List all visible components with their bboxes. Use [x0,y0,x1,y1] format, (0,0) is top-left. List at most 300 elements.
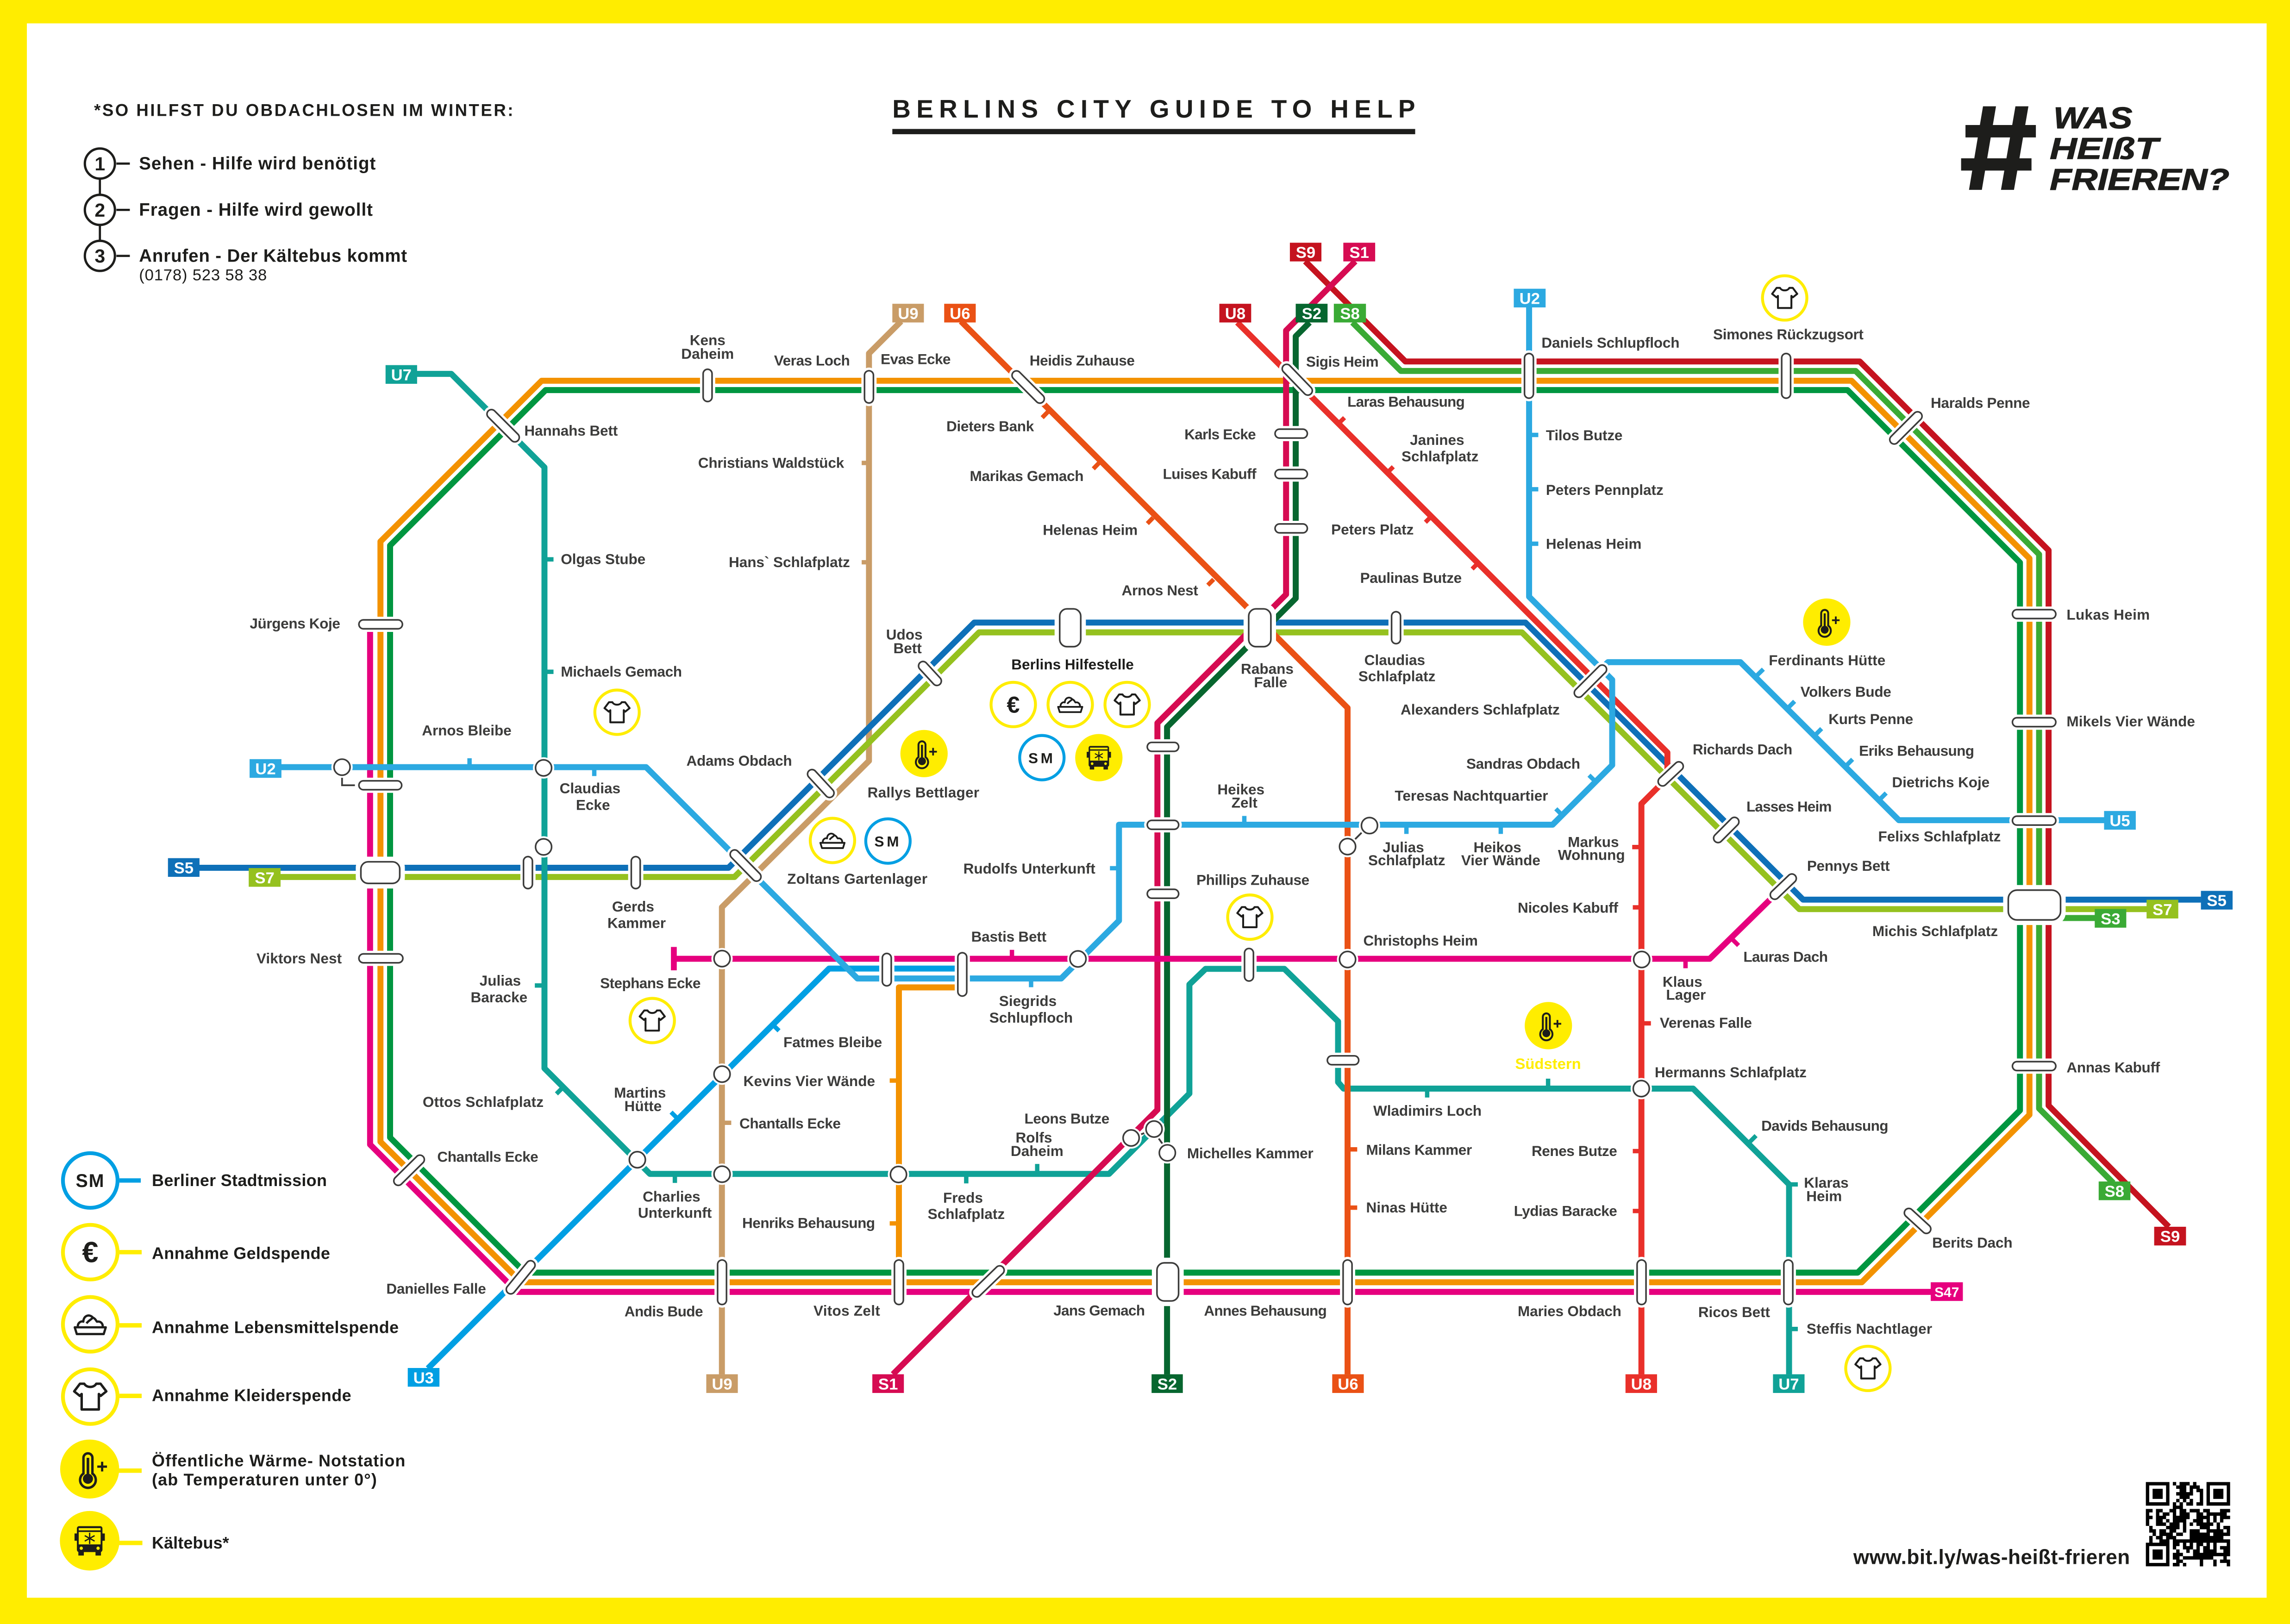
label: Sigis Heim: Sigis Heim [1306,353,1379,370]
label: Heikos Vier Wände: Vier Wände [1461,852,1540,868]
label: Vitos Zelt: Vitos Zelt [813,1302,880,1319]
label: Lukas Heim: Lukas Heim [2066,606,2150,623]
legend: Annahme Lebensmittelspende: Annahme Lebensmittelspende [152,1318,399,1337]
label: Luises Kabuff: Luises Kabuff [1163,466,1257,482]
label: Sandras Obdach: Sandras Obdach [1466,755,1580,772]
badge: S7 right: S7 [2152,901,2172,918]
station: Viktors Nest [363,956,399,961]
station: Adams Obdach [812,774,830,793]
label: Jürgens Koje: Jürgens Koje [250,615,340,631]
badge: S1 [1343,243,1375,262]
line end badges [168,243,2233,1393]
badge: U8: U8 [1225,305,1245,323]
label: Mikels Vier Wände: Mikels Vier Wände [2066,713,2195,730]
badge: S8 bottom [2099,1181,2130,1200]
station: Claudias Ecke [533,757,554,779]
legend: Berliner Stadtmission: Berliner Stadtmission [152,1171,327,1190]
label: Christians Waldstück: Christians Waldstück [698,454,845,471]
label: Klaus Lager: Lager [1666,986,1706,1003]
label: Rudolfs Unterkunft: Rudolfs Unterkunft [964,860,1095,877]
badge: S8: S8 [1340,305,1360,323]
station: Freds [888,1164,909,1185]
label: Ferdinants Hütte: Ferdinants Hütte [1769,652,1885,668]
label: Gerds Kammer: Kammer [607,914,666,931]
badge: U7 bottom [1773,1374,1804,1393]
line: U7 [416,374,1798,1374]
station: Mikels Vier Wände [2017,720,2052,725]
station: Lasses Heim [1718,822,1734,838]
label: Stephans Ecke: Stephans Ecke [600,974,701,991]
badge: S7 left: S7 [255,869,275,887]
icon: shirt at Michaels Gemach [595,690,639,734]
legend: Öffentliche Wärme-Notstation [60,1440,405,1499]
badge: S7 left [249,868,281,887]
label: Peters Pennplatz: Peters Pennplatz [1546,481,1664,498]
label: Julias Baracke: Baracke [470,989,527,1006]
label: Peters Platz: Peters Platz [1331,521,1414,537]
label: Heikes Zelt: Heikes [1217,781,1264,798]
label: Hans Schlafplatz: Hans` Schlafplatz [729,554,850,570]
station: Michis Schlafplatz [2005,887,2064,923]
step 2: 2 [94,200,105,221]
station: Udos Bett [923,666,937,681]
label: Leons Butze: Leons Butze [1024,1110,1109,1127]
icon: shirt at Stephans Ecke [630,999,675,1043]
line: U9: U9 [712,1375,732,1393]
label: Lauras Dach: Lauras Dach [1743,948,1828,965]
label: Berits Dach: Berits Dach [1932,1234,2013,1251]
badge: S8 bottom: S8 [2105,1183,2124,1200]
line: U9: U9 [898,305,919,323]
icon: food at Zoltans Gartenlager [810,818,855,862]
label: Dietrichs Koje: Dietrichs Koje [1892,774,1990,791]
panel: how to help steps [85,100,513,284]
label: Eriks Behausung: Eriks Behausung [1859,743,1974,759]
step 2 [85,195,373,225]
logo: was heißt frieren [1961,101,2229,196]
icon: food at Hilfestelle [1048,682,1092,727]
label: Kurts Penne: Kurts Penne [1828,711,1913,727]
badge: U7 [386,365,417,384]
label: Michelles Kammer: Michelles Kammer [1187,1145,1314,1162]
station: Jans Gemach [1154,1260,1182,1304]
label: Arnos Nest: Arnos Nest [1122,582,1198,599]
line: S9 [1305,261,2169,1227]
label: Arnos Bleibe: Arnos Bleibe [422,722,512,739]
label: Claudias Ecke: Claudias [560,780,620,797]
station: Pennys Bett [1775,879,1792,895]
badge: S9 [1290,243,1321,262]
label: Claudias Ecke: Ecke [576,796,610,813]
station: Lukas Heim [2017,612,2052,617]
label: Haralds Penne: Haralds Penne [1931,394,2030,411]
legend: Annahme Geldspende [63,1225,330,1280]
station: S1 S2 Heikes [1152,823,1174,827]
station: Richards Dach [1663,766,1679,781]
station: left S5 S7 interchange [358,859,403,887]
label: Helenas Heim west: Helenas Heim [1043,522,1138,538]
step connectors [100,163,130,256]
logo text: FRIEREN? [2050,162,2229,196]
legend: Berliner Stadtmission: SM [75,1171,105,1191]
station: S1 crossing [977,1270,1000,1293]
badge: U2 left [250,759,282,778]
label: Daniels Schlupfloch: Daniels Schlupfloch [1541,334,1679,351]
line: U8 [1237,323,1667,1374]
badge: S1: S1 [1350,244,1369,262]
icon: shirt at Simones Rückzugsort [1763,276,1807,320]
step 1: 1 [94,153,105,175]
station: U7 S5 [533,836,554,857]
label: Maries Obdach: Maries Obdach [1518,1303,1621,1319]
step 1: Sehen - Hilfe wird benötigt [139,154,375,174]
label: Rallys Bettlager: Rallys Bettlager [868,784,979,800]
label: Claudias Schlafplatz east: Claudias [1364,651,1425,668]
label: Verenas Falle: Verenas Falle [1660,1014,1752,1031]
station: Daniels Schlupfloch [1527,358,1531,394]
station: Hilfestelle interchange [1057,606,1084,650]
label: Pennys Bett: Pennys Bett [1807,857,1890,874]
label: Heikos Vier Wände: Heikos [1473,839,1521,856]
badge: U2 top [1514,289,1545,307]
label: Siegrids Schlupfloch: Schlupfloch [989,1009,1073,1026]
label: Adams Obdach: Adams Obdach [687,752,792,769]
icon: SM at Zoltans Gartenlager [866,819,910,863]
label: Olgas Stube: Olgas Stube [561,551,645,568]
label: Kevins Vier Wände: Kevins Vier Wände [744,1073,875,1089]
line: S2 [1167,323,1309,1374]
label: Claudias Schlafplatz east: Schlafplatz [1358,668,1435,685]
logo text: HEIßT [2050,131,2161,165]
badge: S5 left: S5 [174,859,194,877]
station: Leons Butze [1144,1118,1165,1140]
legend: Berliner Stadtmission [63,1153,327,1208]
legend: Annahme Geldspende: € [82,1237,98,1269]
badge: S47: S47 [1934,1285,1959,1300]
badge: S5 right [2201,891,2233,910]
station: Phillips Zuhause [1246,953,1251,977]
icon: shirt at Hilfestelle [1105,682,1149,727]
badge: S9 bottom [2154,1227,2186,1246]
legend: Annahme Lebensmittelspende [63,1297,399,1352]
label: Janines Schlafplatz: Schlafplatz [1402,448,1478,465]
badge: S9 bottom: S9 [2160,1228,2180,1246]
line: S7 [281,632,2147,909]
label: Danielles Falle: Danielles Falle [386,1280,486,1297]
badge: U2 top: U2 [1520,290,1540,307]
station: U2 ring transfer [363,783,397,787]
label: Heidis Zuhause: Heidis Zuhause [1030,352,1135,369]
station: Kens Daheim [705,374,710,397]
icon: bus at Hilfestelle [1075,734,1122,781]
station connector links [342,775,1363,1145]
label: Udos Bett: Udos [886,626,923,643]
line: U5 [1592,662,2135,820]
label: Tilos Butze: Tilos Butze [1546,427,1622,443]
label: Milans Kammer: Milans Kammer [1366,1141,1472,1158]
station: Alexanders Schlafplatz [1579,669,1602,693]
station: Andis Bude [720,1264,725,1300]
badge: S5 right: S5 [2207,892,2227,910]
label: Gerds Kammer: Gerds [612,898,654,915]
station: Sigis Heim [1287,369,1308,391]
logo text: WAS [2053,101,2132,135]
label: Jans Gemach: Jans Gemach [1053,1302,1145,1318]
icon: SM at Hilfestelle: SM [1028,750,1056,766]
label: Michis Schlafplatz: Michis Schlafplatz [1872,923,1998,939]
label: Kens Daheim: Daheim [681,345,734,362]
station: Zoltans Gartenlager [735,854,757,877]
station name labels [250,326,2195,1337]
line: S1 [893,261,1355,1374]
label: Alexanders Schlafplatz: Alexanders Schlafplatz [1401,701,1560,718]
line: ring orange [381,381,2029,1282]
label: Martins Hütte: Hütte [625,1098,662,1114]
step 3: 3 [94,245,105,267]
station: Klaus Lager [1631,949,1652,970]
station: Chantalls Ecke [398,1160,420,1181]
station: S1 S2 upper [1152,744,1174,750]
station: U6 U2 [1337,836,1358,857]
label: Udos Bett: Bett [893,640,922,656]
badge: S1 bottom [872,1374,904,1393]
label: Renes Butze: Renes Butze [1532,1143,1617,1159]
station: Heidis Zuhause [1016,375,1040,399]
label: Helenas Heim east: Helenas Heim [1546,536,1641,552]
badge: U3: U3 [413,1369,434,1387]
label: Karls Ecke: Karls Ecke [1184,426,1256,443]
badge: U7: U7 [391,366,412,384]
step 3: Anrufen - Der Kältebus kommt [139,246,407,266]
badge: S2 bottom [1151,1374,1183,1393]
legend: Kältebus [60,1511,229,1571]
station: Peters Platz [1280,526,1303,531]
label: Markus Wohnung: Markus [1568,833,1619,850]
label: Rabans Falle: Falle [1254,674,1287,690]
label: Nicoles Kabuff: Nicoles Kabuff [1518,899,1618,916]
step 1 [85,149,375,179]
icon: euro at Hilfestelle: € [1007,691,1020,718]
label: Henriks Behausung: Henriks Behausung [742,1214,875,1231]
label: Christophs Heim: Christophs Heim [1364,932,1478,949]
label: Veras Loch: Veras Loch [774,352,850,369]
label: Davids Behausung: Davids Behausung [1761,1118,1889,1134]
badge: U8 bottom [1626,1374,1657,1393]
label: Chantalls Ecke west: Chantalls Ecke [437,1149,538,1165]
label: Klaus Lager: Klaus [1663,973,1702,990]
legend: Öffentliche Wärme-Notstation: Öffentliche Wärme- Notstation [152,1451,405,1470]
station: Veras Loch [867,375,871,399]
icon: euro at Hilfestelle [991,682,1035,727]
label: Klaras Heim: Klaras [1804,1174,1849,1191]
station: Jürgens Koje [363,622,398,627]
label: Fatmes Bleibe: Fatmes Bleibe [783,1034,882,1050]
icon: shirt at Steffis Nachtlager [1846,1346,1890,1391]
label: Freds Schlafplatz: Freds [943,1189,983,1206]
station: U2 west [332,756,353,778]
step 2: Fragen - Hilfe wird gewollt [139,200,373,220]
badge: U8 bottom: U8 [1631,1375,1652,1393]
heading: so hilfst du: *SO HILFST DU OBDACHLOSEN IM WINTER: [94,100,513,119]
label: Rabans Falle: Rabans [1241,661,1294,677]
stations: transfer capsules [363,358,2052,1300]
label: Julias Schlafplatz: Julias [1383,839,1424,856]
footer url: www.bit.ly/was-heißt-frieren [1853,1546,2130,1569]
station: S1 S2 lower [1152,891,1174,896]
line: S3 [2056,917,2097,919]
badge: U2 left: U2 [255,761,276,778]
label: Annas Kabuff: Annas Kabuff [2066,1059,2160,1075]
label: Freds Schlafplatz: Schlafplatz [928,1206,1005,1222]
label: Berlins Hilfestelle: Berlins Hilfestelle [1011,656,1134,673]
label: Kens Daheim: Kens [690,331,726,348]
legend: Annahme Kleiderspende [63,1369,351,1424]
line: orange branch U1 [890,987,957,1259]
label: Simones Rückzugsort: Simones Rückzugsort [1713,326,1864,343]
station: Hannahs Bett [491,414,515,437]
line: U2 [281,306,1612,987]
line: S47 [370,625,1932,1292]
station: Felixs Schlafplatz [2017,818,2052,823]
legend: Annahme Geldspende: Annahme Geldspende [152,1243,330,1262]
badge: S8 [1334,304,1366,323]
badge: U5: U5 [2109,812,2130,830]
badge: S2 [1296,304,1327,323]
badge: U6 bottom: U6 [1338,1375,1358,1393]
label: Julias Schlafplatz: Schlafplatz [1368,852,1445,868]
line: S5 [199,623,2201,899]
station: Ricos Bett [1786,1264,1791,1300]
icon: shirt at Phillips Zuhause [1228,895,1272,939]
badge: U5 [2104,811,2136,830]
label: Hermanns Schlafplatz: Hermanns Schlafplatz [1655,1064,1807,1081]
label: Phillips Zuhause: Phillips Zuhause [1196,871,1309,888]
badge: U7 bottom: U7 [1778,1375,1799,1393]
station: U9 U7 [711,1163,733,1185]
station: U7 U6 [1332,1058,1354,1062]
badge: U6 [944,304,976,323]
badge: S2 bottom: S2 [1158,1375,1177,1393]
label: Julias Baracke: Julias [480,972,521,989]
badge: U3 [408,1368,439,1387]
label: Heikes Zelt: Zelt [1232,794,1258,811]
label: Klaras Heim: Heim [1806,1188,1842,1205]
label: Volkers Bude: Volkers Bude [1801,683,1891,700]
station: Rabans Falle [1246,606,1274,650]
line: ring green [390,390,2020,1273]
line: S8 [1352,323,2113,1183]
label: Südstern: Südstern [1515,1055,1581,1072]
station: Martins Hütte [627,1149,648,1170]
badge: S1 bottom: S1 [878,1375,898,1393]
label: Chantalls Ecke center: Chantalls Ecke [739,1115,841,1131]
line: U6 [961,321,1357,1374]
label: Felixs Schlafplatz: Felixs Schlafplatz [1878,828,2001,844]
label: Siegrids Schlupfloch: Siegrids [999,993,1057,1009]
station: magenta capsule 2 [960,957,965,992]
label: Rolfs Daheim: Rolfs [1016,1129,1052,1146]
station: Danielles Falle [511,1265,531,1289]
label: Lasses Heim: Lasses Heim [1746,798,1832,815]
label: Hannahs Bett: Hannahs Bett [524,422,618,439]
label: Markus Wohnung: Wohnung [1558,846,1625,863]
QR code [2146,1482,2230,1566]
station: magenta capsule 1 [884,958,889,981]
line: magenta M [674,898,1771,970]
station: Maries Obdach [1639,1264,1644,1300]
badge: U6: U6 [950,305,970,323]
label: Charlies Unterkunft: Unterkunft [638,1204,712,1221]
station: Claudias Schlafplatz [1394,616,1398,639]
label: Janines Schlafplatz: Janines [1410,431,1464,448]
station: Rolfs Daheim [1120,1127,1142,1149]
icon: SM at Zoltans Gartenlager: SM [875,833,901,849]
station: Berits Dach [1909,1213,1927,1229]
legend: Kältebus: Kältebus* [152,1533,229,1552]
icon: hash sign [1961,106,2036,190]
panel: legend [60,1153,405,1571]
station: Hermanns Schlafplatz [1631,1078,1652,1099]
badge: S3: S3 [2101,910,2121,928]
step 3 [85,241,407,284]
label: Steffis Nachtlager: Steffis Nachtlager [1807,1320,1932,1337]
label: Teresas Nachtquartier: Teresas Nachtquartier [1395,787,1548,804]
station: Annes Behausung [1345,1264,1350,1300]
label: Charlies Unterkunft: Charlies [643,1188,701,1205]
label: Bastis Bett: Bastis Bett [971,928,1047,945]
label: Viktors Nest: Viktors Nest [257,950,342,967]
panel: network map lines [199,261,2201,1393]
label: Ninas Hütte: Ninas Hütte [1366,1199,1447,1216]
icon: warmth at Rallys Bettlager [901,730,948,777]
label: Ricos Bett: Ricos Bett [1698,1304,1771,1320]
badge: S2: S2 [1302,305,1321,323]
badge: S9: S9 [1296,244,1315,262]
label: Andis Bude: Andis Bude [625,1303,703,1319]
label: Rolfs Daheim: Daheim [1011,1143,1064,1159]
station: S5 capsule [526,861,530,884]
label: Laras Behausung: Laras Behausung [1347,394,1465,410]
stations: round [332,756,1652,1185]
label: Paulinas Butze: Paulinas Butze [1360,569,1462,586]
icon: warmth at Südstern [1525,1002,1572,1049]
label: Zoltans Gartenlager: Zoltans Gartenlager [787,870,927,887]
title: BERLINS CITY GUIDE TO HELP [892,94,1415,123]
label: Ottos Schlafplatz: Ottos Schlafplatz [423,1093,544,1110]
icon: warmth at Ferdinants Hütte [1803,599,1851,646]
label: Richards Dach: Richards Dach [1693,741,1792,758]
help point icons on the map [595,276,1890,1391]
station: Annas Kabuff [2017,1064,2052,1068]
label: Annes Behausung: Annes Behausung [1204,1302,1327,1319]
badge: U8 [1220,304,1251,323]
station: Gerds Kammer [633,861,638,884]
station: Kevins Vier Wände [711,1063,733,1085]
line: U3 [428,968,958,1368]
station: Luises Kabuff [1280,472,1303,476]
badge: S47 [1931,1282,1963,1301]
label: Marikas Gemach: Marikas Gemach [970,468,1084,484]
icon: SM at Hilfestelle [1020,736,1064,780]
station: Stephans Ecke [711,948,733,969]
badge: S3 [2095,909,2126,928]
label: Evas Ecke: Evas Ecke [881,350,951,367]
legend: Öffentliche Wärme-Notstation: (ab Temperaturen unter 0°) [152,1470,377,1489]
label: Michaels Gemach: Michaels Gemach [561,663,682,680]
station: Karls Ecke [1280,431,1303,436]
station: Christophs Heim [1337,949,1358,970]
station: Michelles Kammer [1157,1142,1178,1163]
